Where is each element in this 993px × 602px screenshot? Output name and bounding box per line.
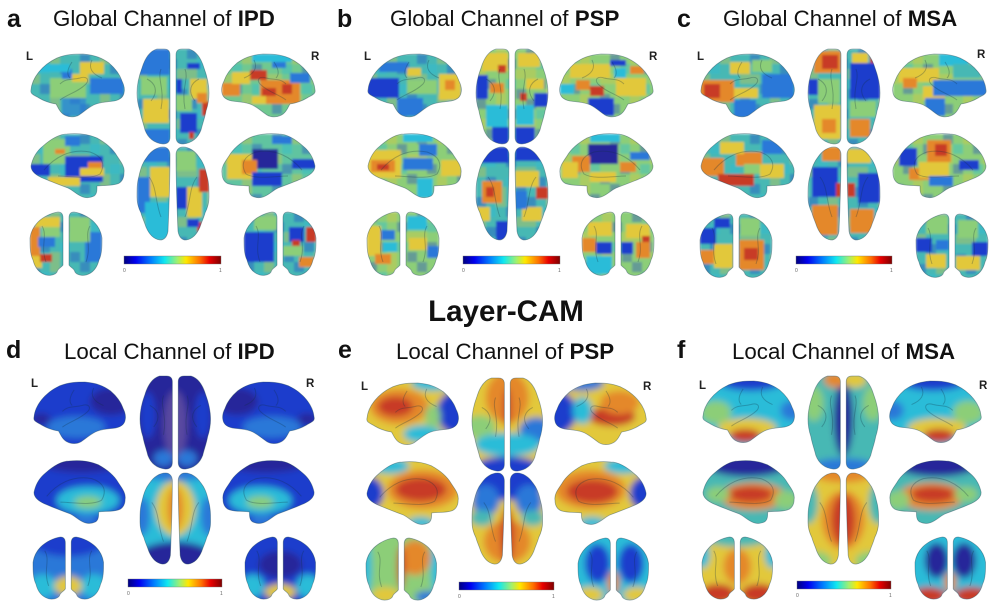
- heading e: Local Channel of PSP: [396, 339, 614, 364]
- brain: bottom view: [808, 147, 880, 247]
- brain: top view: [476, 49, 548, 149]
- brain: right medial: [222, 460, 314, 524]
- panel a: global channel of IPD: [7, 5, 322, 278]
- brain: top view: [808, 49, 880, 149]
- side label L: L: [361, 381, 368, 393]
- brain: bottom view: [798, 463, 888, 581]
- brain: bottom view: [476, 147, 548, 247]
- brain: top view: [137, 49, 209, 149]
- side label R: R: [977, 49, 986, 61]
- brain: front view right: [244, 212, 316, 278]
- colour bar b: 0: [462, 268, 465, 274]
- brain: left medial: [700, 133, 794, 198]
- colour bar a: 0: [123, 268, 126, 274]
- panel b: global channel of PSP: [337, 5, 660, 278]
- colour bar f: 1: [889, 593, 892, 599]
- brain: right medial: [880, 449, 993, 539]
- brain: front view right: [905, 527, 993, 602]
- brain: left lateral: [700, 54, 795, 118]
- brain: left lateral: [692, 371, 810, 459]
- brain: front view right: [568, 528, 658, 602]
- side label R: R: [649, 51, 658, 63]
- brain: right lateral: [222, 382, 315, 444]
- brain: bottom view: [462, 457, 552, 581]
- brain: left lateral: [368, 54, 462, 118]
- colour bar c: 1: [890, 268, 893, 274]
- colour bar f: 0: [796, 593, 799, 599]
- figure title: Layer-CAM: [428, 295, 584, 328]
- heading b: Global Channel of PSP: [390, 6, 619, 31]
- brain: left medial: [34, 460, 126, 524]
- panel letter d: d: [6, 336, 21, 364]
- colour bar b: [462, 256, 561, 274]
- brain: left medial: [368, 133, 462, 198]
- panel letter b: b: [337, 5, 352, 33]
- brain: front view left: [30, 212, 102, 278]
- brain: left medial: [692, 449, 810, 539]
- colour bar a: [123, 256, 222, 274]
- colour bar e: 0: [458, 594, 461, 600]
- side label L: L: [699, 380, 706, 392]
- brain: front view right: [244, 536, 316, 600]
- brain: front view left: [692, 527, 782, 602]
- brain: top view: [472, 378, 543, 472]
- brain: left lateral: [366, 382, 459, 445]
- side label L: L: [26, 51, 33, 63]
- panel letter e: e: [338, 336, 352, 364]
- heading f: Local Channel of MSA: [732, 339, 955, 364]
- colour bar c: 0: [795, 268, 798, 274]
- colour bar d: [127, 579, 223, 597]
- brain: left medial: [348, 452, 474, 540]
- side label R: R: [643, 381, 652, 393]
- brain: right lateral: [554, 382, 647, 445]
- colour bar b: 1: [558, 268, 561, 274]
- brain: right lateral: [559, 54, 654, 118]
- brain: top view: [140, 376, 211, 470]
- heading c: Global Channel of MSA: [723, 6, 957, 31]
- side label L: L: [697, 51, 704, 63]
- brain: right lateral: [880, 371, 993, 459]
- brain: right medial: [221, 133, 316, 198]
- brain: right lateral: [221, 54, 316, 118]
- brain: left lateral: [30, 54, 125, 118]
- heading a: Global Channel of IPD: [53, 6, 275, 31]
- brain: front view left: [367, 212, 439, 278]
- brain: front view right: [916, 214, 988, 280]
- side label R: R: [306, 378, 315, 390]
- colour bar f: [796, 581, 892, 599]
- panel e: local channel of PSP: [338, 336, 665, 602]
- brain: left medial: [30, 133, 124, 198]
- side label L: L: [31, 378, 38, 390]
- heading d: Local Channel of IPD: [64, 339, 275, 364]
- side label R: R: [979, 380, 988, 392]
- brain: right lateral: [892, 54, 986, 118]
- colour bar a: 1: [219, 268, 222, 274]
- brain: right medial: [892, 133, 986, 198]
- colour bar e: 1: [552, 594, 555, 600]
- panel letter c: c: [677, 5, 691, 33]
- colour bar c: [795, 256, 893, 274]
- brain: front view left: [700, 214, 772, 280]
- panel letter a: a: [7, 5, 22, 33]
- brain: bottom view: [137, 147, 209, 247]
- panel c: global channel of MSA: [677, 5, 993, 280]
- brain: front view left: [32, 536, 104, 600]
- brain: right medial: [545, 452, 665, 540]
- brain: right medial: [559, 133, 654, 198]
- panel letter f: f: [677, 336, 686, 364]
- brain: left lateral: [34, 382, 126, 444]
- side label L: L: [364, 51, 371, 63]
- brain: front view right: [582, 212, 654, 278]
- brain: top view: [798, 366, 888, 484]
- brain: front view left: [356, 528, 446, 602]
- colour bar d: 0: [127, 591, 130, 597]
- panel d: local channel of IPD: [6, 336, 331, 602]
- panel f: local channel of MSA: [677, 336, 993, 602]
- colour bar e: [458, 582, 555, 600]
- brain: bottom view: [140, 472, 211, 564]
- side label R: R: [311, 51, 320, 63]
- colour bar d: 1: [220, 591, 223, 597]
